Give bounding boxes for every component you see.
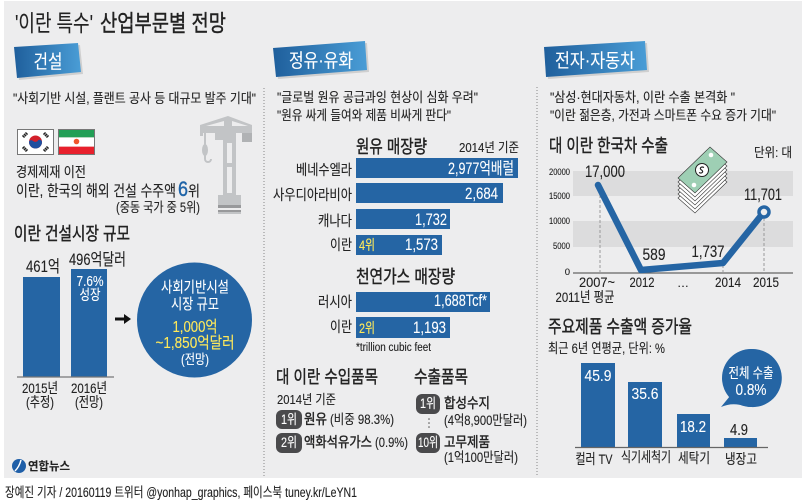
icon: crane [200,116,252,214]
icon: Iranian flag [58,130,94,154]
line chart: car exports to Iran: 15000 [549,191,570,202]
quote: refining [277,90,478,123]
callout: infrastructure market: ~1,850억달러 [156,334,234,352]
list: exports to Iran [414,367,527,465]
bar chart: crude oil reserves: 베네수엘라 [296,162,352,179]
title [15,10,226,36]
line chart: car exports to Iran: 5000 [553,241,570,252]
icon: stack of money [678,147,727,213]
bar chart: construction market [17,250,126,410]
bar chart: natural gas reserves: 2위 [359,320,375,336]
heading: main product export growth: 최근 6년 연평균, 단위: % [548,341,665,356]
quote: electronics: "이란 젊은층, 가전과 스마트폰 수요 증가 기대" [550,108,776,123]
bar chart: product export growth: 4.9 [730,422,748,439]
bar chart: crude oil reserves: 이란 [330,237,352,254]
text: Iran rank: 6 [178,178,188,201]
bar chart: construction market: 7.6% [76,274,104,290]
heading: main product export growth: 주요제품 수출액 증가율 [548,317,692,337]
list: exports to Iran: 합성수지 [444,395,490,411]
callout: total exports [721,349,782,407]
tag: construction: 건설 [34,51,62,73]
bar chart: crude oil reserves: 원유 매장량 [356,137,427,157]
list: imports from Iran: 2위 [281,435,297,450]
bar chart: construction market: (추정) [26,394,54,410]
list: imports from Iran: 원유 [304,411,327,427]
bar chart: product export growth: 컬러 TV [576,451,613,467]
line chart: car exports to Iran: 2014 [715,274,741,290]
arrow [115,314,131,324]
bar chart: product export growth [575,363,768,467]
bar chart: natural gas reserves: 1,688Tcf* [434,292,487,310]
bar chart: crude oil reserves: 2,977억배럴 [448,159,514,178]
list: imports from Iran: (0.9%) [375,435,408,450]
line chart: car exports to Iran: 589 [642,245,666,264]
tag: refining [273,41,369,79]
line chart: car exports to Iran: 1,737 [692,242,724,261]
footer credit: 장예진 기자 / 20160119 트위터 @yonhap_graphics, 페이스북 tuney.kr/LeYN1 [5,485,357,500]
list: imports from Iran: 액화석유가스 [304,434,372,450]
bar chart: construction market: 496억달러 [69,250,126,269]
list: exports to Iran: (4억8,900만달러) [444,413,527,428]
line chart: car exports to Iran: 17,000 [585,162,625,181]
line chart: car exports to Iran: 2012 [630,274,655,290]
list: imports from Iran: (비중 98.3%) [330,412,394,427]
heading: market size: 이란 건설시장 규모 [14,224,130,244]
list: imports from Iran [276,367,408,453]
callout: total exports: 전체 수출 [728,365,774,381]
bar chart: construction market: 2016년 [71,380,107,396]
callout: infrastructure market: (전망) [181,352,209,367]
bar chart: crude oil reserves [273,137,519,255]
bar chart: product export growth: 18.2 [680,419,706,436]
line chart: car exports to Iran [549,136,793,305]
list: exports to Iran: (1억100만달러) [444,450,518,465]
panel: electronics and autos [544,41,793,467]
list: imports from Iran: 대 이란 수입품목 [276,367,378,387]
line chart: car exports to Iran: 2015 [753,274,779,290]
bar chart: crude oil reserves: 4위 [359,237,375,253]
bar chart: construction market: 461억 [26,257,60,276]
tag: electronics [544,41,649,79]
list: exports to Iran: 고무제품 [444,434,490,450]
icon: Korean flag [18,130,54,154]
bar chart: construction market: 성장 [80,287,100,304]
bar chart: product export growth: 세탁기 [678,450,710,466]
bar chart: natural gas reserves: 이란 [330,319,352,336]
line chart: car exports to Iran: 2011년 평균 [556,289,615,305]
panel: construction [13,43,256,410]
bar chart: crude oil reserves: 캐나다 [318,213,352,230]
bar chart: natural gas reserves: 1,193 [413,319,446,337]
bar chart: natural gas reserves [318,267,490,354]
line chart: car exports to Iran: 11,701 [744,185,782,204]
bar chart: crude oil reserves: 2014년 기준 [459,140,519,155]
line chart: car exports to Iran: 10000 [549,216,570,227]
bar chart: product export growth: 45.9 [584,368,612,385]
line chart: car exports to Iran: 0 [565,267,570,278]
quote: refining: "원유 싸게 들여와 제품 비싸게 판다" [277,108,451,123]
bar chart: crude oil reserves: 1,732 [415,211,447,229]
title: '이란 특수' [15,10,93,36]
heading: main product export growth [548,317,692,356]
callout: infrastructure market: 사회기반시설 [161,279,229,296]
list: imports from Iran: 2014년 기준 [277,392,336,407]
quote: electronics [550,90,776,123]
list: exports to Iran: 수출품목 [414,367,468,387]
bar chart: construction market: 2015년 [22,380,58,396]
text: before sanctions: 경제제재 이전 [16,164,86,180]
line chart: car exports to Iran: 2007~ [579,274,615,290]
line chart: car exports to Iran: 20000 [549,167,570,178]
bar chart: product export growth: 35.6 [632,386,659,403]
list: exports to Iran: 10위 [418,435,438,450]
bar chart: crude oil reserves: 1,573 [405,236,438,254]
logo: Yonhap News: 연합뉴스 [28,459,70,473]
bar chart: product export growth: 식기세척기 [621,449,671,465]
tag: electronics: 전자·자동차 [555,50,635,72]
bar chart: crude oil reserves: 사우디아라비아 [273,187,352,204]
panel: refining and petrochemicals [273,41,527,465]
callout: infrastructure market: 시장 규모 [171,296,219,313]
text: Iran rank: 위 [188,183,200,200]
logo: Yonhap News [12,459,70,473]
line chart: car exports to Iran: 대 이란 한국차 수출 [549,136,668,156]
bar chart: natural gas reserves: 천연가스 매장량 [356,267,455,287]
bar chart: crude oil reserves: 2,684 [465,185,498,203]
quote: refining: "글로벌 원유 공급과잉 현상이 심화 우려" [277,90,478,105]
text: Iran rank: 이란, 한국의 해외 건설 수주액 [16,182,176,200]
text: middle east rank: (중동 국가 중 5위) [116,200,200,215]
list: imports from Iran: 1위 [281,412,297,427]
bar chart: natural gas reserves: *trillion cubic feet [356,342,432,354]
tag: construction [14,43,83,80]
quote: electronics: "삼성·현대자동차, 이란 수출 본격화 " [550,90,735,105]
line chart: car exports to Iran: 단위: 대 [754,145,792,160]
bar chart: product export growth: 냉장고 [725,451,757,467]
tag: refining: 정유·유화 [289,50,353,72]
title: 산업부문별 전망 [100,10,226,36]
bar chart: construction market: (전망) [75,394,103,410]
callout: infrastructure market [137,262,252,378]
list: exports to Iran: 1위 [420,396,436,411]
line chart: car exports to Iran: … [677,276,689,290]
callout: total exports: 0.8% [736,382,766,399]
callout: infrastructure market: 1,000억 [172,318,218,336]
quote: construction: "사회기반 시설, 플랜트 공사 등 대규모 발주 기대" [13,91,256,106]
bar chart: natural gas reserves: 러시아 [318,294,352,311]
